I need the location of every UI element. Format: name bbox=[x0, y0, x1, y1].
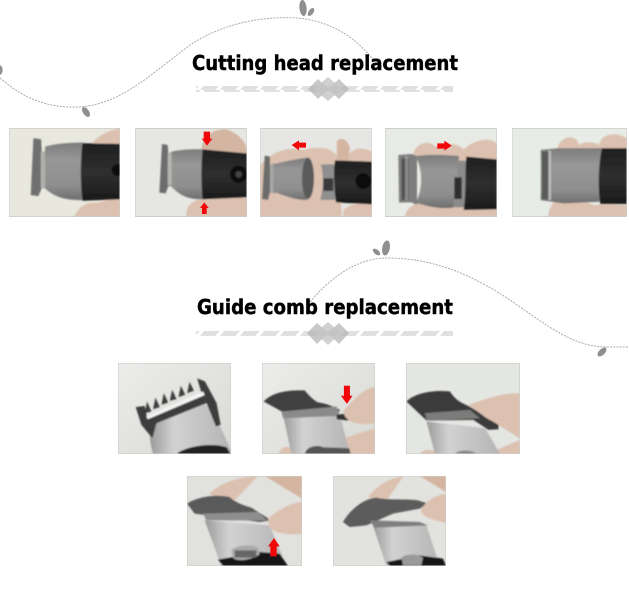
photo 1: trimmer assembled bbox=[9, 128, 120, 217]
photo 5: assembled with new cutting head bbox=[512, 128, 627, 217]
photo 7: pressing the comb down bbox=[262, 363, 375, 454]
divider: top section bbox=[196, 77, 453, 101]
photo 8: comb tab released bbox=[406, 363, 520, 454]
icon: leaf bottom bbox=[80, 106, 92, 118]
arrow: press up bbox=[200, 202, 209, 214]
icon: leaf large lower bbox=[381, 240, 391, 256]
title: cutting head replacement: Cutting head replacement bbox=[192, 51, 458, 75]
icon: leaf right lower bbox=[596, 346, 608, 358]
photo 10: comb removed bbox=[333, 476, 446, 566]
decorative curve: top section bbox=[0, 0, 375, 118]
arrow: pull left bbox=[292, 140, 306, 150]
icon: leaf large top bbox=[299, 0, 307, 16]
arrow: push comb up bbox=[268, 538, 280, 556]
icon: leaf small top bbox=[306, 7, 316, 17]
arrow: press comb tab bbox=[341, 386, 353, 404]
divider: lower section bbox=[196, 322, 453, 345]
photo 4: fitting the new cutting head bbox=[385, 128, 497, 217]
photo 9: lifting the comb from below bbox=[187, 476, 302, 566]
arrow: push right bbox=[437, 141, 452, 151]
icon: leaf left bbox=[0, 65, 3, 75]
title: guide comb replacement: Guide comb replacement bbox=[197, 295, 453, 319]
photo 3: pulling off the cutting head bbox=[260, 128, 372, 217]
decorative curve: lower section bbox=[310, 240, 629, 358]
icon: leaf small lower bbox=[372, 247, 381, 257]
photo 6: guide comb attached bbox=[118, 363, 231, 454]
photo 2: pressing the release buttons bbox=[135, 128, 247, 217]
arrow: press down bbox=[202, 132, 212, 146]
